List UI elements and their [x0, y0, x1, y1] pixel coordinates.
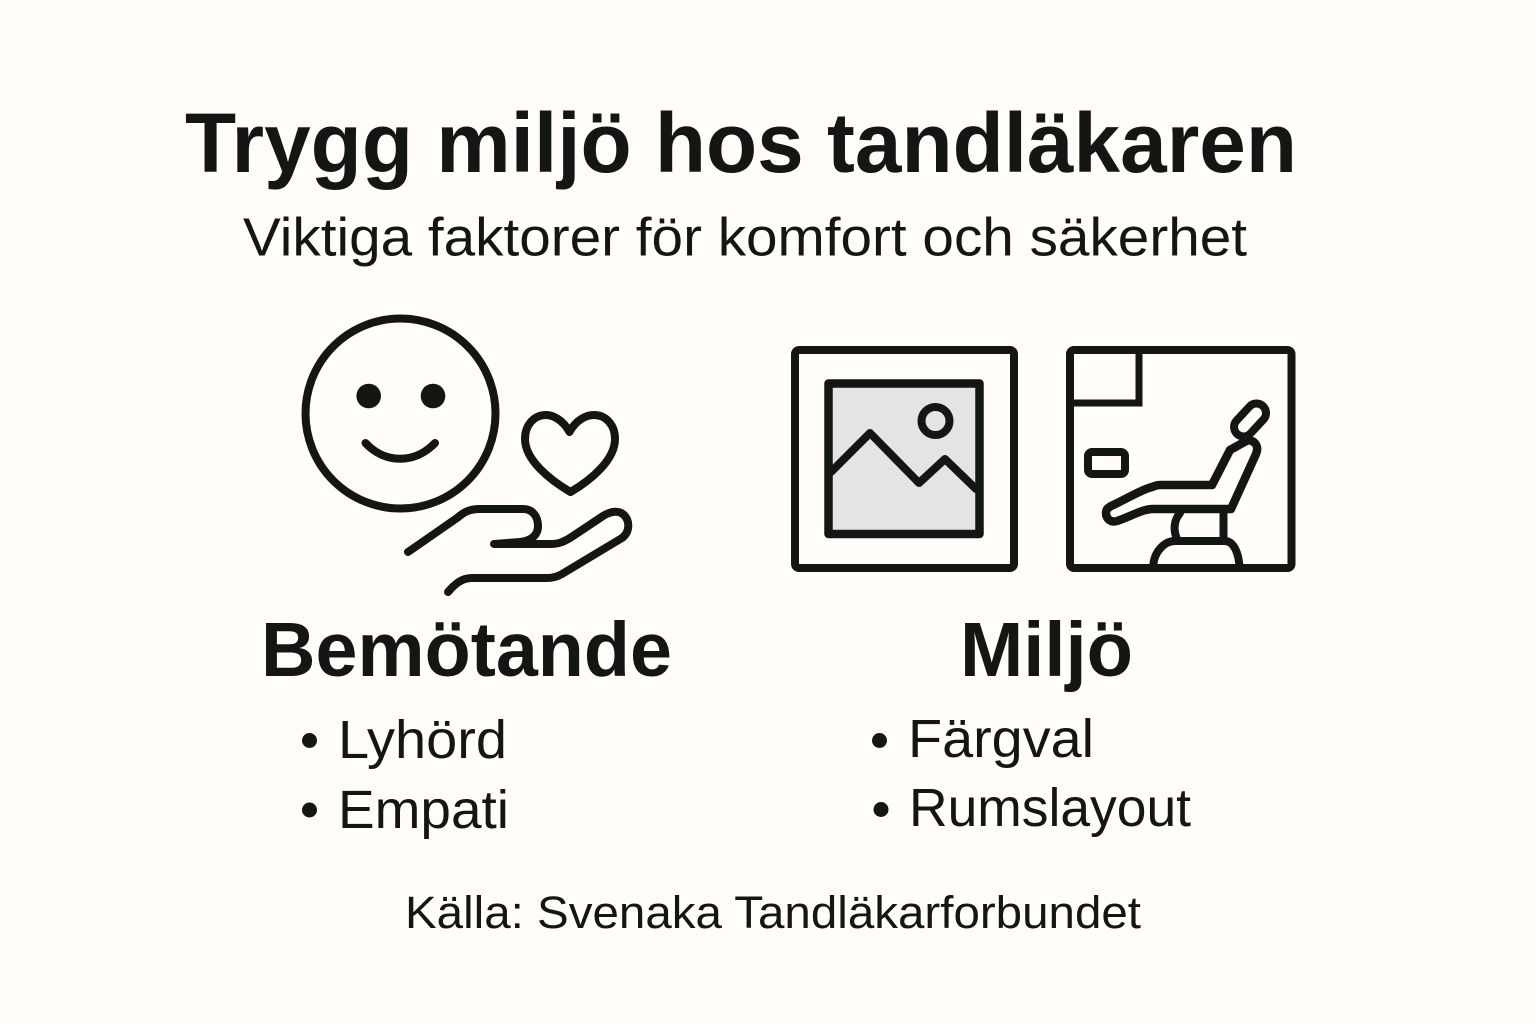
heart	[525, 415, 615, 492]
list: Miljö: Färgval	[908, 709, 1094, 769]
list: Bemötande: Empati	[338, 780, 509, 840]
picture with mountains and sun	[828, 384, 980, 534]
source note: Källa: Svenaka Tandläkarforbundet	[405, 887, 1142, 938]
icon: treatment room with dental chair	[1070, 350, 1292, 568]
heading: Bemötande: Bemötande	[261, 607, 672, 693]
smiley face	[306, 318, 496, 508]
dental chair	[1106, 400, 1270, 568]
list: Miljö: Rumslayout	[909, 778, 1191, 838]
list: Bemötande	[302, 710, 509, 840]
list: Miljö	[872, 709, 1191, 838]
icon: smiley, heart and open hand	[306, 318, 628, 592]
heading: Miljö: Miljö	[960, 607, 1133, 693]
title: Trygg miljö hos tandläkaren	[185, 96, 1297, 190]
open hand	[408, 509, 628, 592]
list: Bemötande: Lyhörd	[338, 710, 507, 770]
subtitle: Viktiga faktorer för komfort och säkerhet	[243, 208, 1247, 268]
icon: framed picture	[795, 350, 1014, 568]
